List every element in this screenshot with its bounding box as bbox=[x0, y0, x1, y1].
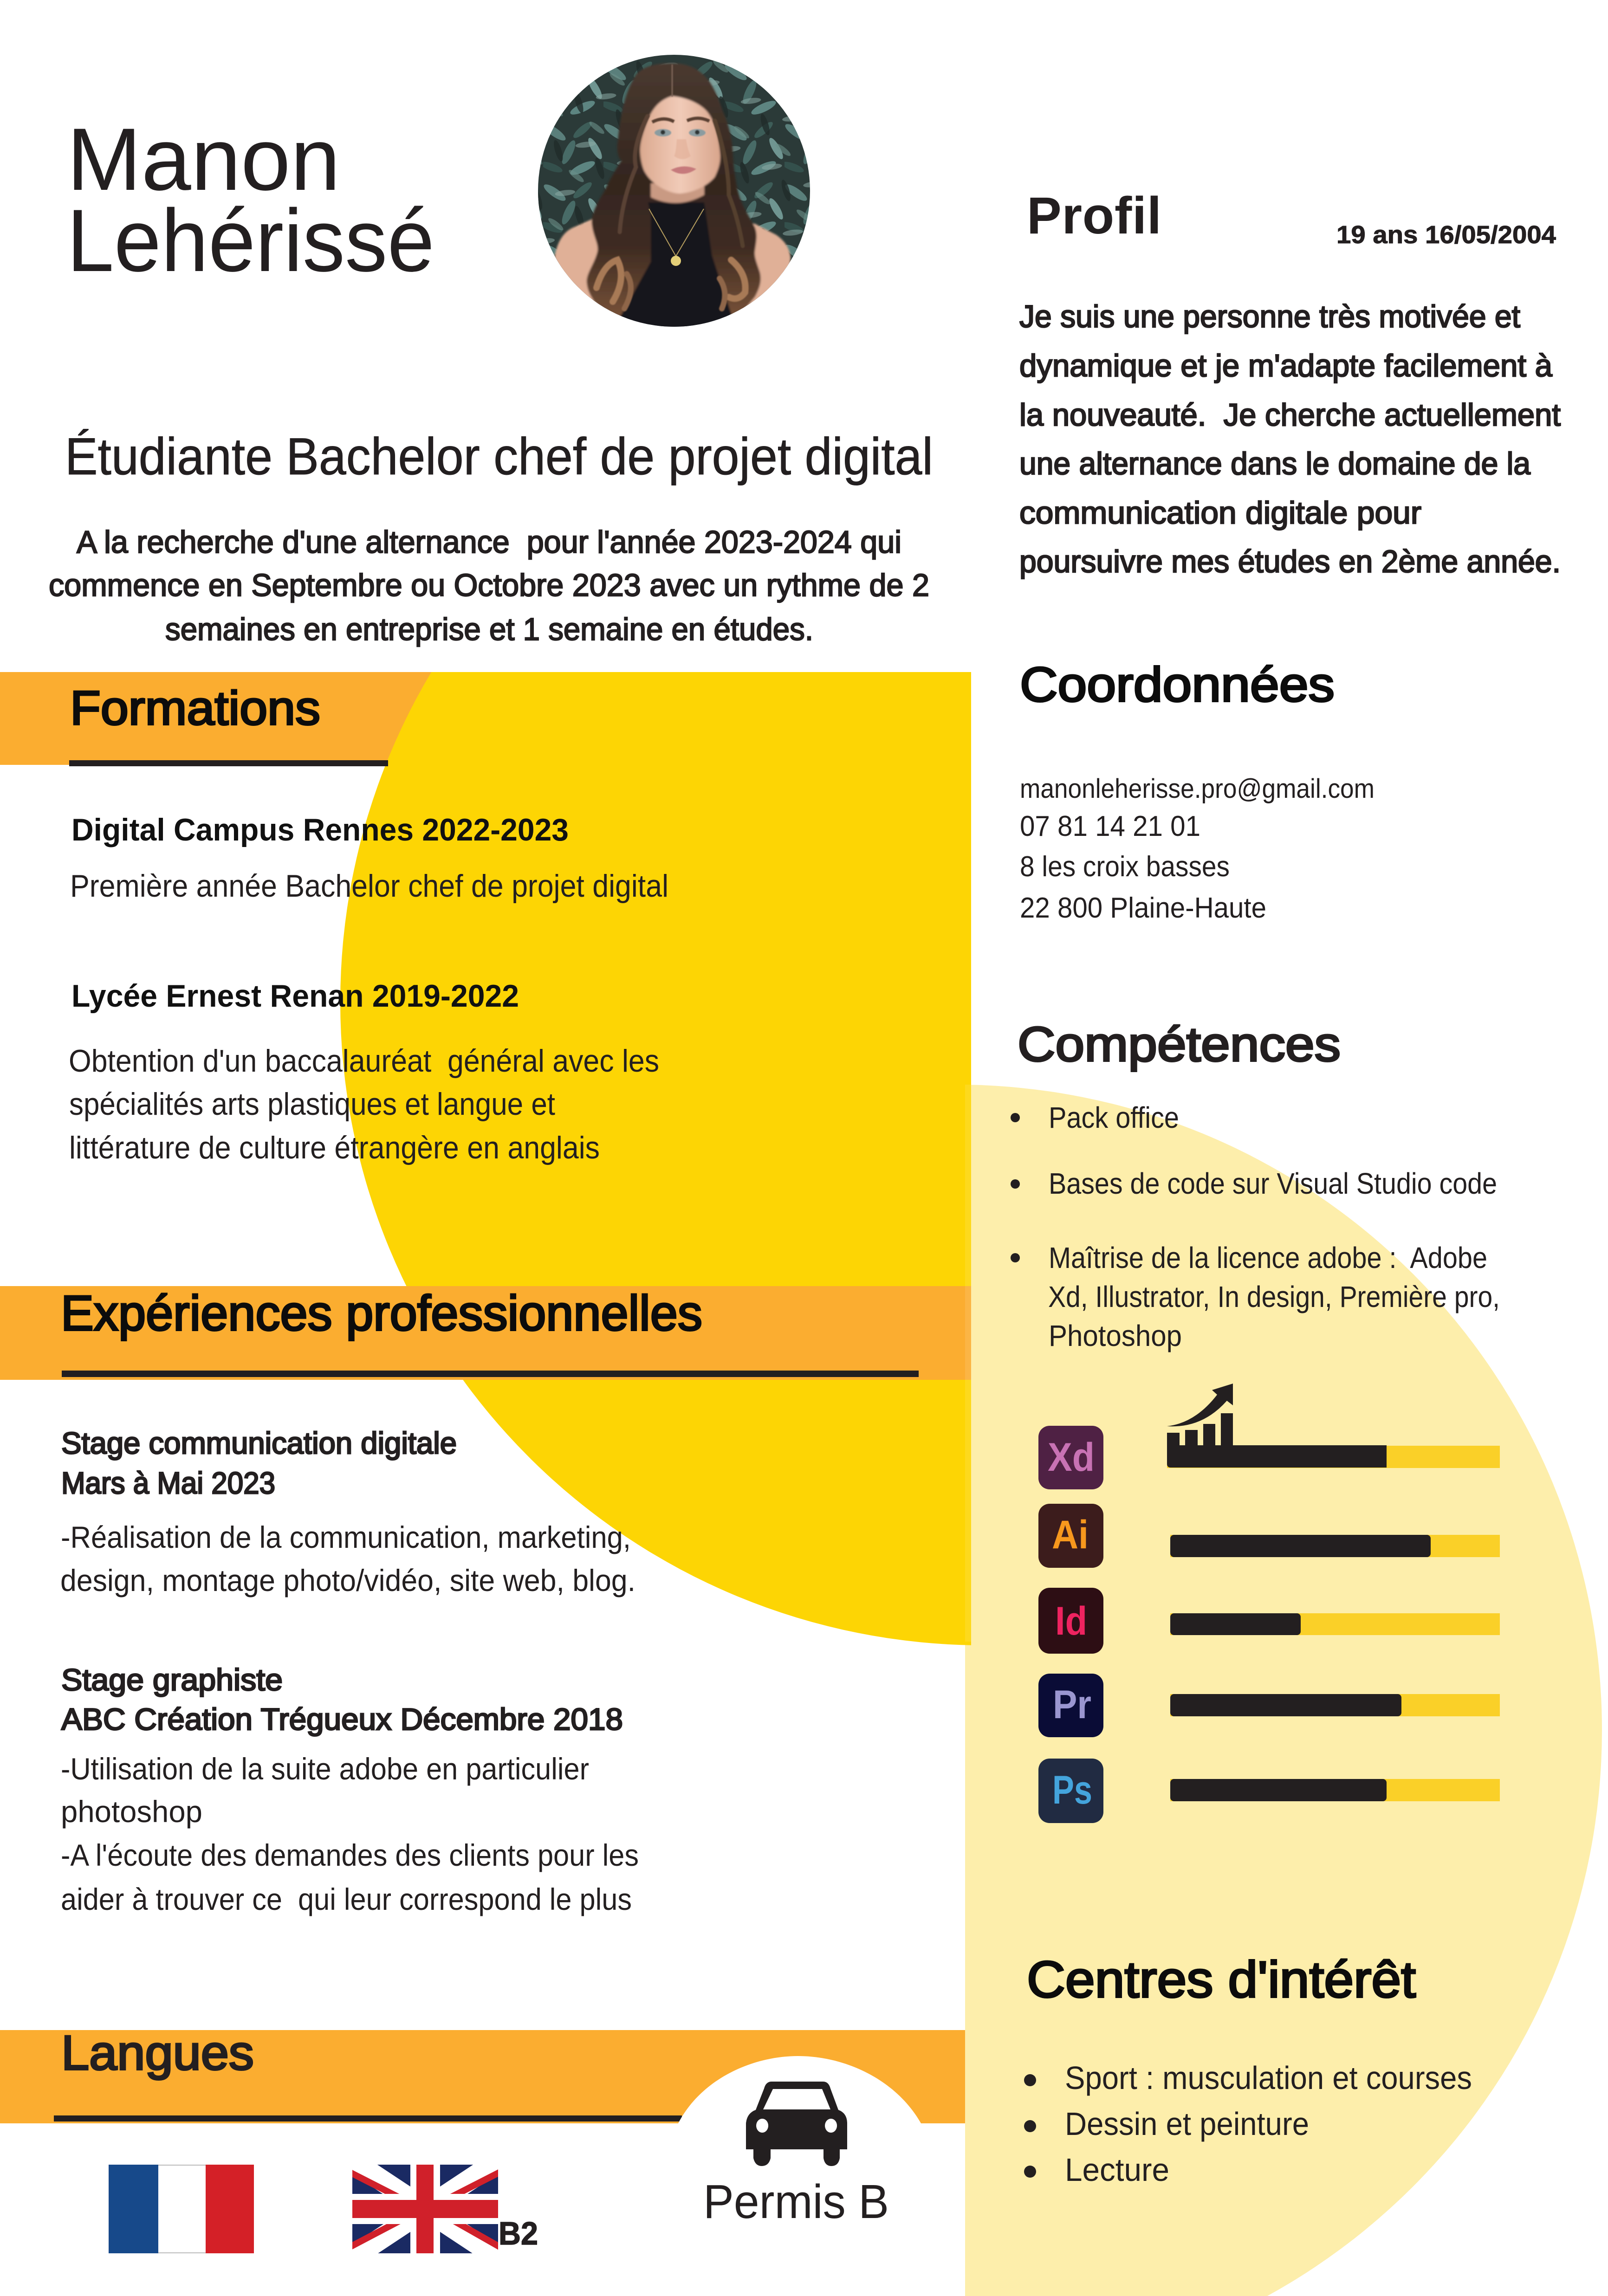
icon: Adobe InDesign: Id bbox=[1055, 1599, 1087, 1643]
text: Formations entries: Lycée Ernest Renan 2019-2022 bbox=[71, 978, 519, 1014]
portrait photo bbox=[534, 51, 817, 334]
label: Permis B: Permis B bbox=[703, 2175, 889, 2228]
text: contact details: 8 les croix basses bbox=[1020, 851, 1230, 883]
list: interests: Dessin et peinture bbox=[1065, 2106, 1309, 2142]
text: Experience entries: ABC Création Trégueux Décembre 2018 bbox=[61, 1702, 623, 1736]
list: skills bbox=[1011, 1101, 1500, 1352]
text: profile: Je suis une personne très motivée et bbox=[1019, 299, 1520, 334]
overlap strip bbox=[965, 1085, 971, 1642]
text: Experience entries: aider à trouver ce qui leur correspond le plus bbox=[61, 1882, 632, 1916]
icon: Adobe Premiere Pro bbox=[1038, 1674, 1103, 1737]
list: skills: Bases de code sur Visual Studio code bbox=[1049, 1167, 1497, 1200]
text: objective: A la recherche d'une alternance pour l'année 2023-2024 qui bbox=[77, 524, 901, 560]
list: skills: Photoshop bbox=[1049, 1319, 1182, 1352]
icon: Adobe InDesign bbox=[1038, 1588, 1103, 1654]
bar: Premiere skill bbox=[1170, 1694, 1500, 1716]
text: profile: la nouveauté. Je cherche actuellement bbox=[1019, 397, 1561, 433]
title: name bbox=[67, 110, 434, 290]
heading: Expériences professionnelles bbox=[61, 1285, 919, 1377]
icon: growth chart bbox=[1167, 1384, 1233, 1447]
heading: Expériences professionnelles: Expériences professionnelles bbox=[61, 1285, 702, 1341]
text: Experience entries: Stage communication digitale bbox=[61, 1426, 457, 1460]
text: Experience entries: Stage graphiste bbox=[61, 1662, 283, 1697]
title: name: Manon bbox=[67, 110, 340, 209]
list: interests bbox=[1024, 2060, 1472, 2188]
text: Experience entries: -Réalisation de la communication, marketing, bbox=[61, 1520, 631, 1554]
text: Formations entries: Première année Bachelor chef de projet digital bbox=[70, 868, 668, 904]
text: Formations entries: Obtention d'un baccalauréat général avec les bbox=[69, 1043, 659, 1079]
icon: Adobe Xd: Xd bbox=[1048, 1435, 1095, 1480]
icon: Adobe Photoshop: Ps bbox=[1052, 1768, 1092, 1812]
title: name: Lehérissé bbox=[67, 191, 434, 290]
heading: Compétences: Compétences bbox=[1018, 1017, 1341, 1072]
icon: French flag bbox=[109, 2165, 254, 2253]
heading: Formations: Formations bbox=[70, 681, 320, 735]
text: Formations entries: Digital Campus Rennes 2022-2023 bbox=[71, 812, 569, 847]
hair highlights bbox=[597, 65, 746, 309]
text: profile: communication digitale pour bbox=[1019, 495, 1421, 530]
white arch behind car bbox=[678, 2056, 921, 2123]
text: contact details: manonleherisse.pro@gmail.com bbox=[1020, 774, 1375, 804]
text: age and birth date: 19 ans 16/05/2004 bbox=[1336, 221, 1556, 249]
list: interests: Sport : musculation et courses bbox=[1065, 2060, 1472, 2096]
bar: Photoshop skill bbox=[1170, 1779, 1500, 1801]
hair bbox=[587, 63, 761, 320]
text: Experience entries: -A l'écoute des demandes des clients pour les bbox=[61, 1838, 639, 1872]
yellow background circle bbox=[340, 672, 971, 1645]
text: Formations entries: littérature de culture étrangère en anglais bbox=[69, 1130, 600, 1165]
icon: Adobe Premiere Pro: Pr bbox=[1053, 1682, 1091, 1727]
heading: Formations bbox=[69, 681, 388, 766]
heading: job title: Étudiante Bachelor chef de projet digital bbox=[65, 427, 933, 485]
list: skills: Pack office bbox=[1049, 1101, 1179, 1134]
text: Experience entries bbox=[60, 1426, 639, 1916]
text: objective: semaines en entreprise et 1 semaine en études. bbox=[165, 612, 813, 647]
text: contact details bbox=[1020, 774, 1375, 924]
shoulders bbox=[553, 218, 792, 307]
icon: Adobe Xd bbox=[1038, 1426, 1103, 1489]
pale yellow background circle bbox=[965, 1085, 1602, 2296]
text: objective: commence en Septembre ou Octobre 2023 avec un rythme de 2 bbox=[49, 568, 929, 603]
neck bbox=[651, 183, 704, 203]
band: Langues bbox=[0, 2030, 965, 2123]
text: profile: une alternance dans le domaine de la bbox=[1019, 446, 1530, 481]
text: Experience entries: photoshop bbox=[61, 1794, 202, 1829]
text: Experience entries: -Utilisation de la suite adobe en particulier bbox=[61, 1752, 589, 1786]
icon: Adobe Illustrator: Ai bbox=[1052, 1513, 1089, 1557]
bar: Xd skill bbox=[1167, 1445, 1500, 1468]
text: contact details: 07 81 14 21 01 bbox=[1020, 810, 1200, 842]
band: Formations bbox=[0, 672, 464, 765]
text: contact details: 22 800 Plaine-Haute bbox=[1020, 892, 1266, 924]
heading: Profil: Profil bbox=[1027, 187, 1161, 245]
bar: Illustrator skill bbox=[1170, 1535, 1500, 1557]
black top bbox=[610, 202, 738, 334]
text: Experience entries: design, montage photo/vidéo, site web, blog. bbox=[60, 1563, 635, 1597]
text: Experience entries: Mars à Mai 2023 bbox=[61, 1466, 275, 1500]
heading: Centres d'intérêt: Centres d'intérêt bbox=[1027, 1951, 1416, 2008]
list: skills: Xd, Illustrator, In design, Première pro, bbox=[1048, 1280, 1500, 1313]
band: Expériences bbox=[0, 1286, 971, 1380]
list: skills: Maîtrise de la licence adobe : Adobe bbox=[1049, 1241, 1487, 1274]
heading: Langues bbox=[54, 2026, 682, 2121]
icon: Adobe Illustrator bbox=[1038, 1504, 1103, 1568]
label: B2 level: B2 bbox=[499, 2215, 538, 2251]
heading: Langues: Langues bbox=[61, 2026, 254, 2080]
text: objective bbox=[49, 524, 929, 647]
text: profile bbox=[1019, 299, 1561, 579]
face bbox=[640, 96, 720, 194]
text: Formations entries bbox=[69, 812, 668, 1165]
text: Formations entries: spécialités arts plastiques et langue et bbox=[69, 1087, 555, 1122]
text: profile: dynamique et je m'adapte facilement à bbox=[1019, 348, 1552, 383]
list: interests: Lecture bbox=[1065, 2152, 1169, 2188]
bar: InDesign skill bbox=[1170, 1613, 1500, 1635]
facial details bbox=[652, 118, 709, 174]
heading: Coordonnées: Coordonnées bbox=[1020, 658, 1335, 712]
icon: car bbox=[746, 2082, 847, 2166]
icon: UK flag bbox=[341, 2154, 509, 2265]
text: profile: poursuivre mes études en 2ème année. bbox=[1019, 544, 1561, 579]
icon: Adobe Photoshop bbox=[1038, 1759, 1103, 1823]
